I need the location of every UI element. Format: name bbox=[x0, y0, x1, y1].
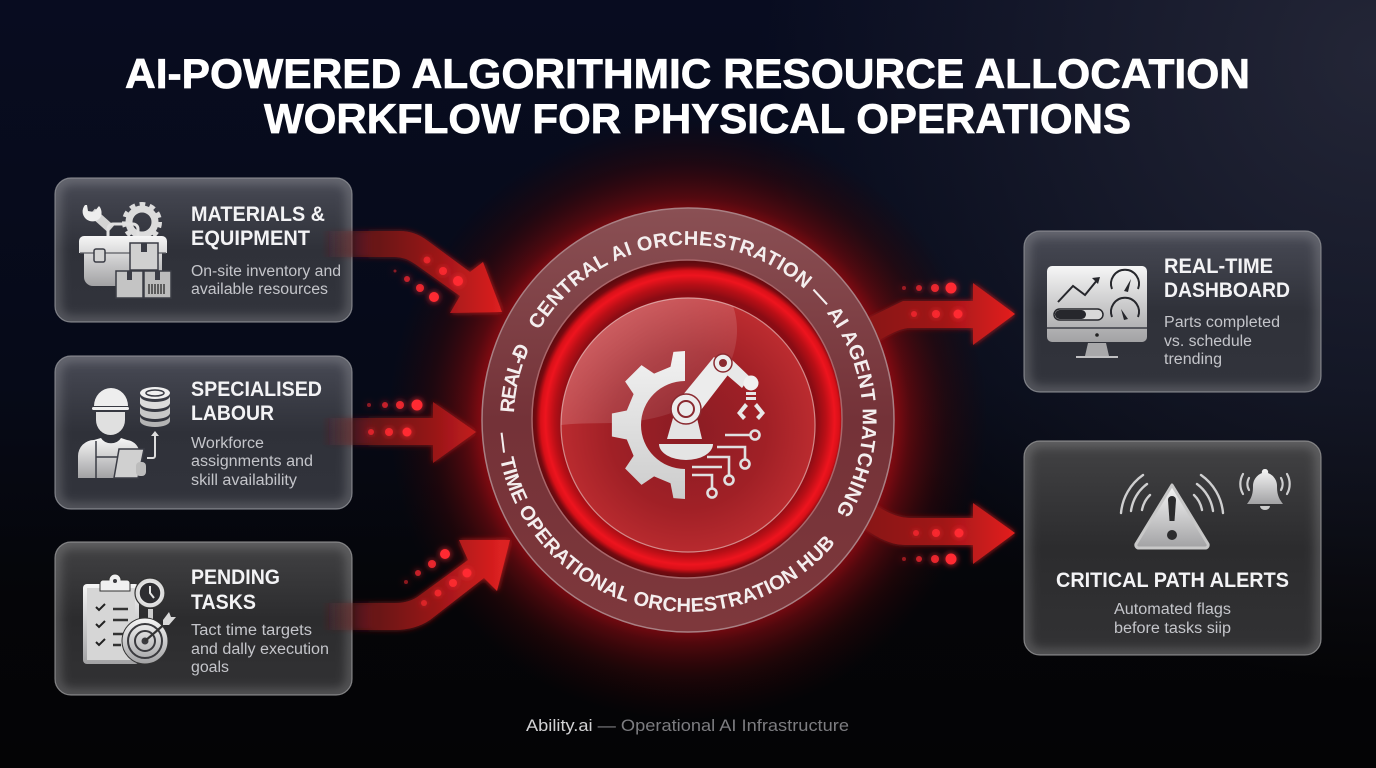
description: before tasks siip bbox=[1114, 620, 1231, 637]
heading bbox=[191, 566, 280, 614]
description: and dally execution bbox=[191, 641, 329, 658]
heading bbox=[191, 378, 322, 425]
description bbox=[191, 263, 341, 298]
description bbox=[191, 435, 313, 489]
icon: clipboard, clock and target bbox=[83, 574, 176, 664]
title bbox=[125, 50, 1250, 142]
heading: SPECIALISED bbox=[191, 378, 322, 401]
title: WORKFLOW FOR PHYSICAL OPERATIONS bbox=[264, 95, 1131, 142]
heading: CRITICAL PATH ALERTS bbox=[1056, 569, 1289, 592]
glossy disk bbox=[561, 298, 815, 552]
panel: critical path alerts bbox=[1024, 441, 1321, 655]
heading: EQUIPMENT bbox=[191, 227, 310, 250]
central hub bbox=[481, 207, 895, 633]
icon: toolbox with wrench, gear and boxes bbox=[79, 204, 171, 298]
arrow: labour to hub bbox=[322, 400, 476, 463]
description: goals bbox=[191, 659, 229, 676]
description: skill availability bbox=[191, 472, 297, 489]
title: AI-POWERED ALGORITHMIC RESOURCE ALLOCATION bbox=[125, 50, 1250, 97]
description: Workforce bbox=[191, 435, 264, 452]
panel: materials and equipment bbox=[55, 178, 352, 322]
icon: monitor with chart and gauges bbox=[1047, 266, 1147, 358]
arrow: hub to alerts bbox=[860, 495, 1015, 564]
description: Tact time targets bbox=[191, 622, 312, 639]
arrow: tasks to hub bbox=[322, 540, 510, 630]
arrow: materials to hub bbox=[322, 231, 502, 313]
description: vs. schedule bbox=[1164, 333, 1252, 350]
description bbox=[1114, 601, 1231, 637]
outer glass ring bbox=[482, 208, 894, 632]
heading: REAL-TIME bbox=[1164, 255, 1273, 278]
panel: real-time dashboard bbox=[1024, 231, 1321, 392]
ring text: upper arc: CENTRAL AI ORCHESTRATION — AI AGENT MATCHING bbox=[530, 231, 877, 516]
heading: DASHBOARD bbox=[1164, 279, 1290, 302]
icon: gear with robot arm and circuits bbox=[612, 351, 765, 499]
icon: bell bbox=[1240, 469, 1290, 510]
heading: MATERIALS & bbox=[191, 203, 325, 226]
panel: pending tasks bbox=[55, 542, 352, 695]
arrow: hub to dashboard bbox=[860, 282, 1015, 352]
inner red glow ring bbox=[532, 260, 842, 578]
description bbox=[191, 622, 329, 676]
icon: worker with tablet and database bbox=[78, 387, 170, 478]
heading bbox=[1164, 255, 1290, 302]
heading: TASKS bbox=[191, 591, 256, 614]
description: Automated flags bbox=[1114, 601, 1231, 618]
icon: warning triangle with signal arcs bbox=[1121, 475, 1223, 548]
description: assignments and bbox=[191, 453, 313, 470]
panel: specialised labour bbox=[55, 356, 352, 509]
heading bbox=[191, 203, 325, 250]
description: available resources bbox=[191, 281, 328, 298]
heading: LABOUR bbox=[191, 402, 274, 425]
description bbox=[1164, 314, 1280, 368]
description: Parts completed bbox=[1164, 314, 1280, 331]
heading: PENDING bbox=[191, 566, 280, 589]
footer: Ability.ai — Operational AI Infrastructure bbox=[526, 716, 849, 735]
description: On-site inventory and bbox=[191, 263, 341, 280]
description: trending bbox=[1164, 351, 1222, 368]
ring text: lower arc: — TIME OPERATIONAL ORCHESTRATION HUB bbox=[500, 432, 834, 612]
ring text: left fragment: REAL-Ð bbox=[500, 344, 528, 412]
